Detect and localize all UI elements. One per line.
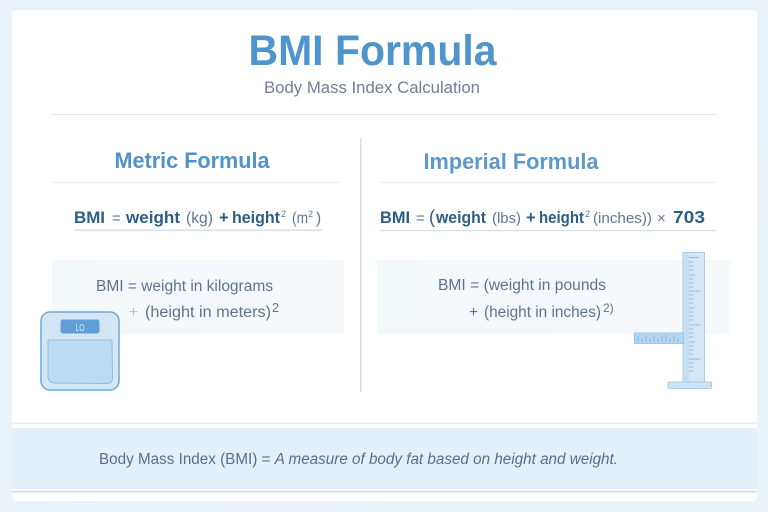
imperial equation: (lbs) [492,210,521,227]
metric equation: weight [125,209,181,227]
footer rules [12,422,757,424]
imperial equation: ( [429,207,435,227]
subtitle: Body Mass Index Calculation [264,79,480,97]
icon: bathroom scale [41,312,119,390]
icon: height ruler [634,252,712,388]
metric equation: height [232,209,280,227]
imperial heading: Imperial Formula [424,149,599,174]
imperial equation: = [416,210,425,227]
column divider [360,138,362,392]
imperial explanation panel [377,260,730,334]
metric equation: = [112,210,121,227]
imperial equation: × [657,210,666,227]
imperial equation: height [539,209,584,227]
imperial equation: 703 [673,207,705,227]
panel: imperial formula: + [469,304,478,321]
metric equation: (kg) [186,210,213,227]
panel: imperial formula: 2) [603,301,614,315]
metric equation: + [219,209,229,227]
metric explanation text: BMI = weight in kilograms [96,278,273,295]
imperial equation: 2 [585,209,590,219]
metric equation: 2 [308,209,313,219]
metric equation: 2 [281,209,286,219]
header divider [52,114,716,115]
imperial equation: + [526,209,536,227]
imperial equation: weight [435,209,486,227]
metric equation: BMI [74,209,105,227]
definition text: Body Mass Index (BMI) = A measure of body fat based on height and weight. [99,451,618,468]
title: BMI Formula [248,27,498,75]
panel: imperial formula: (height in inches) [484,304,601,321]
panel: metric formula: + [129,304,138,321]
panel: imperial formula [377,149,730,334]
icon: bathroom scale: LO [76,323,85,334]
panel: metric formula: (height in meters) [145,304,271,321]
imperial explanation text: BMI = (weight in pounds [438,277,606,294]
metric equation: ) [316,210,321,227]
panel: metric formula [52,148,344,334]
imperial equation: BMI [380,209,410,227]
metric explanation panel [52,260,344,334]
metric equation: (m [292,210,308,227]
imperial equation: (inches)) [593,210,652,227]
metric heading: Metric Formula [114,148,270,173]
footer definition band [12,428,757,489]
panel: metric formula: 2 [272,301,279,315]
